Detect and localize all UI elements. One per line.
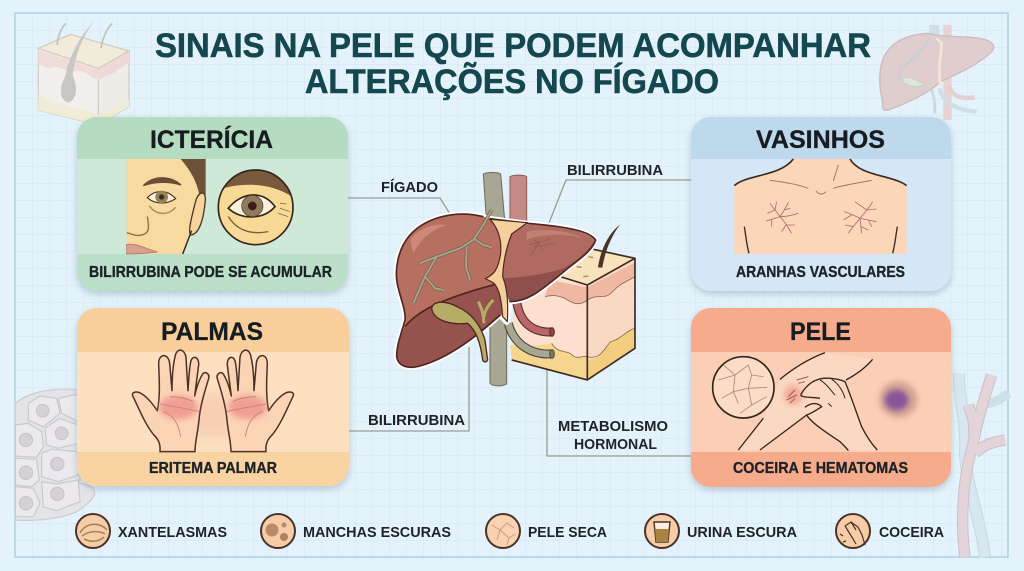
- label: bilirrubina top: BILIRRUBINA: [567, 162, 663, 179]
- legend label: urina escura: URINA ESCURA: [687, 524, 797, 541]
- caption: eritema palmar: ERITEMA PALMAR: [149, 460, 277, 477]
- icon: xantelasmas: [76, 514, 110, 548]
- icon: pele seca: [486, 514, 520, 548]
- central illustration: liver with skin block: [396, 172, 635, 386]
- gallbladder and bile duct: [432, 300, 493, 362]
- caption: coceira e hematomas: COCEIRA E HEMATOMAS: [733, 460, 908, 477]
- decoration: faded liver: [880, 25, 994, 120]
- liver: [396, 214, 596, 367]
- caption: aranhas vasculares: ARANHAS VASCULARES: [736, 264, 905, 281]
- hepatic veins: [413, 210, 492, 303]
- panel: vasinhos: [691, 117, 951, 291]
- legend label: coceira: COCEIRA: [879, 524, 944, 541]
- vessels entering skin: [508, 302, 554, 358]
- leader lines: [348, 180, 691, 456]
- legend label: manchas escuras: MANCHAS ESCURAS: [303, 524, 451, 541]
- label: fígado: FÍGADO: [381, 179, 438, 196]
- icon: urina escura: [645, 514, 679, 548]
- illustration: red palms: [132, 350, 293, 452]
- illustration: scratching arm, dry skin and bruise: [713, 353, 918, 451]
- label: bilirrubina bottom: BILIRRUBINA: [368, 412, 465, 429]
- title: [155, 27, 871, 101]
- vessel: vena cava: [483, 172, 507, 386]
- decoration: faded vessels: [959, 373, 1008, 557]
- panel: icterícia: [77, 117, 348, 291]
- heading: palmas: PALMAS: [161, 318, 263, 346]
- falciform ligament: [485, 219, 527, 322]
- legend label: pele seca: PELE SECA: [528, 524, 607, 541]
- decoration: faded liver cells: [15, 389, 95, 520]
- panel: palmas: [77, 308, 349, 486]
- icon: manchas escuras: [261, 514, 295, 548]
- illustration: chest with spider veins: [734, 159, 907, 254]
- heading: icterícia: ICTERÍCIA: [150, 125, 273, 154]
- label: metabolismo hormonal: [558, 418, 668, 453]
- label: metabolismo hormonal: METABOLISMO: [558, 418, 668, 435]
- title: ALTERAÇÕES NO FÍGADO: [305, 63, 719, 101]
- icon: coceira: [836, 514, 870, 548]
- label: metabolismo hormonal: HORMONAL: [574, 436, 657, 453]
- title: SINAIS NA PELE QUE PODEM ACOMPANHAR: [155, 27, 871, 65]
- legend row: [76, 514, 944, 548]
- heading: pele: PELE: [790, 318, 851, 346]
- caption: bilirrubina pode se acumular: BILIRRUBINA PODE SE ACUMULAR: [89, 264, 332, 281]
- illustration: jaundiced face and eye: [127, 159, 297, 254]
- panel: pele: [691, 308, 951, 487]
- vessel: aorta: [510, 175, 527, 225]
- skin block: [510, 224, 635, 380]
- legend label: xantelasmas: XANTELASMAS: [118, 524, 227, 541]
- heading: vasinhos: VASINHOS: [756, 126, 885, 154]
- decoration: faded skin block: [38, 21, 129, 125]
